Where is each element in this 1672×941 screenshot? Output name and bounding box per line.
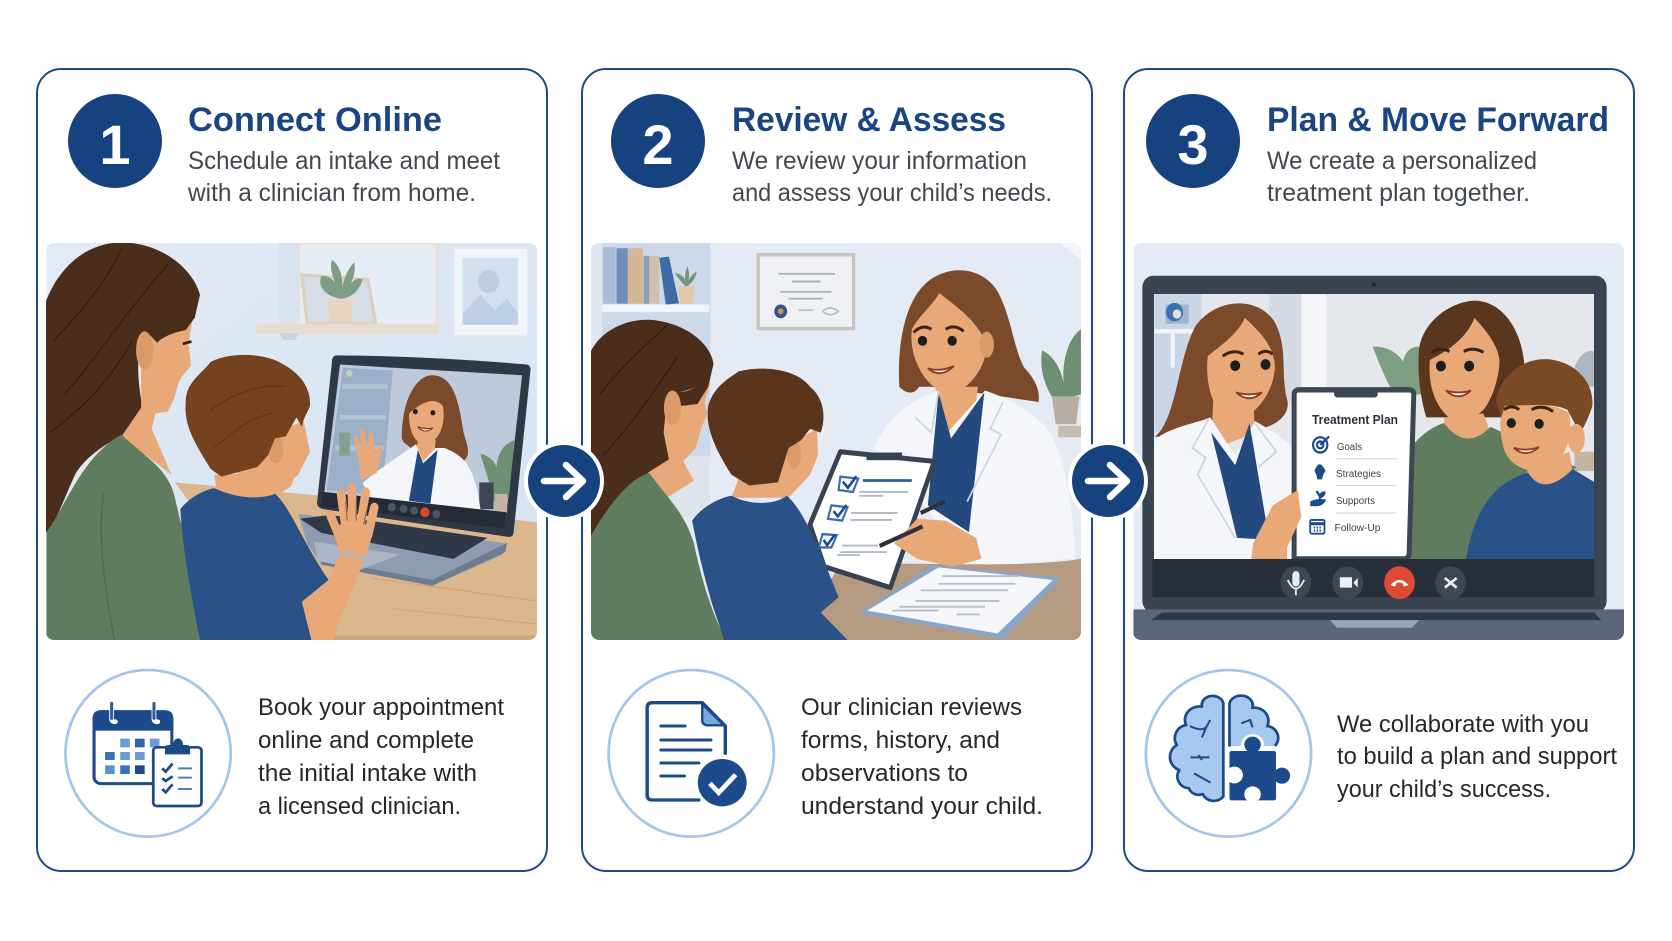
subheading text 3	[1267, 147, 1537, 207]
subheading text 2	[732, 147, 1052, 207]
body text 2: understand your child.	[801, 793, 1043, 820]
subheading text 2: and assess your child’s needs.	[732, 179, 1052, 207]
tablet list: goals, strategies, supports, follow-up	[1334, 442, 1381, 534]
body text 3: your child’s success.	[1337, 776, 1551, 803]
body text 3: to build a plan and support	[1337, 743, 1617, 770]
subheading text 1: Schedule an intake and meet	[188, 147, 500, 175]
panel: step 2 review and assess	[582, 69, 1092, 871]
tablet list: goals, strategies, supports, follow-up: Goals	[1337, 442, 1362, 453]
feature icon: brain and puzzle piece	[1146, 670, 1311, 837]
subheading text 2: We review your information	[732, 147, 1027, 175]
number badge 2: 2	[642, 113, 674, 176]
subheading text 3: We create a personalized	[1267, 147, 1537, 175]
body text 2	[801, 694, 1043, 820]
arrow: step 1 to step 2	[524, 441, 604, 521]
heading: Plan and Move Forward: Plan & Move Forward	[1267, 101, 1609, 139]
number badge 2	[611, 94, 705, 188]
feature icon: calendar and clipboard	[65, 670, 231, 837]
card outline 3	[1124, 69, 1634, 871]
subheading text 1	[187, 147, 500, 207]
illustration: laptop video call with treatment plan	[1133, 242, 1624, 640]
panel: step 3 plan and move forward	[1124, 69, 1634, 871]
body text 1: online and complete	[258, 727, 474, 754]
body text 2: Our clinician reviews	[801, 694, 1022, 721]
subheading text 1: with a clinician from home.	[187, 179, 476, 207]
tablet label: Treatment Plan: Treatment Plan	[1312, 413, 1398, 427]
number badge 3: 3	[1177, 113, 1209, 176]
number badge 1	[68, 94, 162, 188]
number badge 3	[1146, 94, 1240, 188]
heading: Connect Online: Connect Online	[188, 101, 442, 139]
card outline 1	[37, 69, 547, 871]
body text 1: a licensed clinician.	[258, 793, 461, 820]
tablet list: goals, strategies, supports, follow-up: Strategies	[1336, 469, 1381, 480]
feature icon: document with check	[609, 670, 774, 837]
number badge 1: 1	[99, 113, 131, 176]
body text 1	[258, 694, 504, 820]
arrow: step 2 to step 3	[1068, 441, 1148, 521]
body text 2: observations to	[801, 760, 968, 787]
subheading text 3: treatment plan together.	[1267, 179, 1530, 207]
panel: step 1 connect online	[37, 69, 547, 871]
tablet list: goals, strategies, supports, follow-up: Follow-Up	[1334, 523, 1381, 534]
body text 1: Book your appointment	[258, 694, 504, 721]
body text 2: forms, history, and	[801, 727, 1000, 754]
body text 3: We collaborate with you	[1337, 711, 1589, 738]
illustration: parent and child on video call	[43, 242, 537, 640]
tablet list: goals, strategies, supports, follow-up: Supports	[1336, 496, 1375, 507]
card outline 2	[582, 69, 1092, 871]
body text 3	[1337, 711, 1617, 803]
heading: Review and Assess: Review & Assess	[732, 101, 1006, 139]
illustration: clinician reviewing checklist with family	[589, 242, 1081, 640]
body text 1: the initial intake with	[258, 760, 477, 787]
